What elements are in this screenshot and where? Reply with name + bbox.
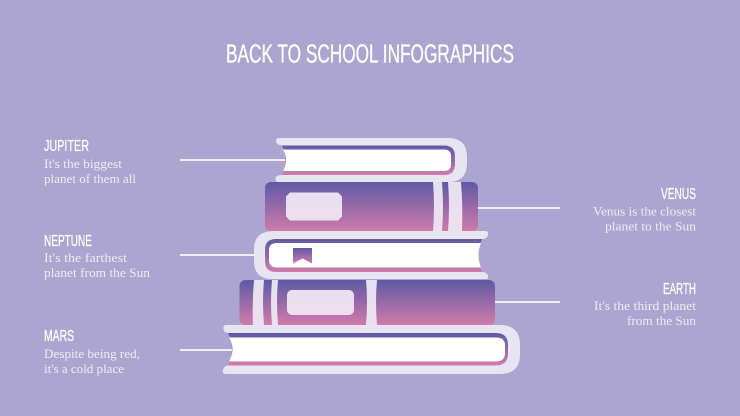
book stack illustration [223,138,520,374]
text block: Venus: Venus is the closest [593,204,697,218]
book 5: open-edge book, bottom of stack [223,325,520,374]
connector: Earth [495,301,560,303]
icon: bookmark [293,248,312,264]
book 2: closed purple book with label [265,182,478,232]
text block: Neptune: NEPTUNE [44,233,92,250]
text block: Venus: planet to the Sun [605,220,697,234]
text block: Venus: VENUS [661,186,696,203]
text block: Jupiter: planet of them all [44,172,137,186]
title: BACK TO SCHOOL INFOGRAPHICS [226,38,514,68]
text block: Neptune: It's the farthest [44,251,128,265]
text block: Jupiter [44,138,137,186]
text block: Earth: EARTH [663,281,696,298]
connector: Venus [478,207,560,209]
text block: Earth [594,281,697,328]
text block: Mars: it's a cold place [44,362,124,376]
book 1: open-edge book, top of stack [275,138,467,182]
text block: Earth: from the Sun [627,314,697,328]
text block: Mars: MARS [44,328,74,345]
text block: Jupiter: It's the biggest [44,157,123,171]
text block: Mars: Despite being red, [44,347,140,361]
text block: Mars [44,328,140,376]
connector: Jupiter [180,159,286,161]
text block: Jupiter: JUPITER [44,138,89,155]
text block: Venus [593,186,697,234]
text block: Earth: It's the third planet [594,299,697,313]
connector: Mars [180,349,233,351]
connector: Neptune [180,254,255,256]
text block: Neptune [44,233,151,280]
book 4: closed purple book with label [240,280,495,325]
book 3: open-edge book with bookmark [254,231,488,279]
text block: Neptune: planet from the Sun [44,266,151,280]
